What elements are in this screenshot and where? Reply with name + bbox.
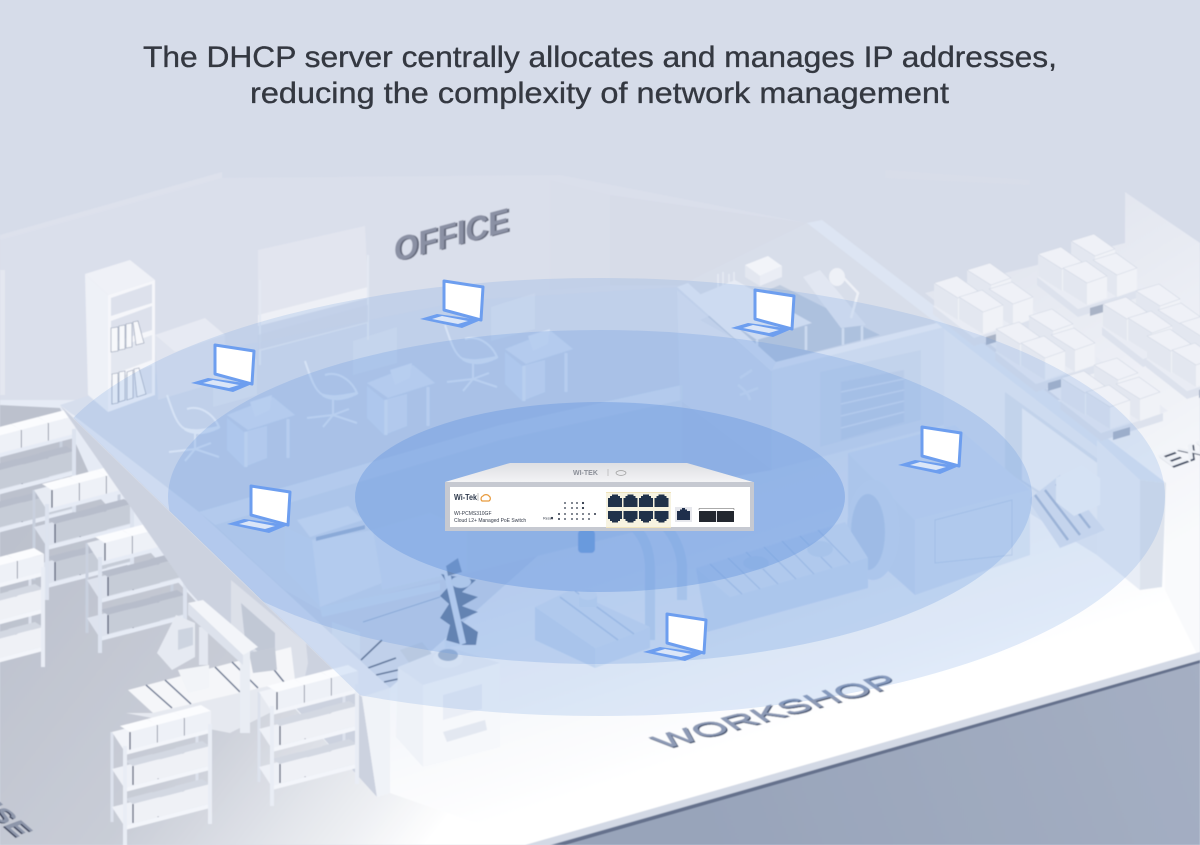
back walls xyxy=(0,170,1030,420)
OFFICE sign: OFFICE xyxy=(396,202,511,270)
bookshelf xyxy=(85,260,155,412)
right warehouse floor xyxy=(925,192,1200,660)
switch logo: Wi-Tek xyxy=(454,492,477,502)
lathe machine xyxy=(285,506,467,622)
warehouse racks back xyxy=(0,410,186,689)
factory scene xyxy=(0,170,1200,845)
laptop 1 xyxy=(191,345,254,392)
laptop 4 xyxy=(898,427,961,474)
roller conveyor right xyxy=(1028,465,1105,548)
laptop 2 xyxy=(420,281,483,328)
status leds xyxy=(551,502,596,520)
small room xyxy=(677,223,944,470)
network switch: WI-TEK xyxy=(573,470,598,477)
workshop floor xyxy=(0,400,1200,845)
title: reducing the complexity of network management xyxy=(250,77,950,110)
desks and chairs xyxy=(167,293,573,467)
title: The DHCP server centrally allocates and manages IP addresses, xyxy=(143,41,1057,74)
bottom dark band xyxy=(525,652,1200,845)
console port xyxy=(675,507,692,522)
cloud icon xyxy=(481,495,490,501)
arch over conveyor xyxy=(625,520,682,640)
WORKSHOP floor label: WORKSHOP xyxy=(644,670,907,753)
robot arm xyxy=(440,558,478,648)
OFFICE sign: OFFICE xyxy=(394,201,509,270)
switch description: Cloud L2+ Managed PoE Switch xyxy=(454,518,526,524)
outer ring xyxy=(35,278,1165,716)
middle ring xyxy=(168,330,1032,664)
warehouse floor left xyxy=(0,405,539,845)
low cabinet xyxy=(155,318,225,400)
laptop 6 xyxy=(643,614,706,661)
dividing wall xyxy=(60,405,390,797)
large machine right xyxy=(847,425,1030,595)
laptop 3 xyxy=(731,290,794,337)
office floor xyxy=(60,287,772,688)
pallets of boxes xyxy=(933,234,1200,441)
WORKSHOP floor label xyxy=(644,670,909,754)
fan stairs xyxy=(332,622,432,682)
model text: WI-PCMS310GF xyxy=(454,511,492,517)
bottle under switch xyxy=(578,530,595,553)
title xyxy=(143,41,1057,110)
inner ring xyxy=(355,402,845,592)
sfp ports xyxy=(699,508,734,522)
gantry conveyor xyxy=(126,600,295,733)
reset label: Reset xyxy=(543,516,554,520)
warehouse racks front xyxy=(112,665,358,845)
wall pillar right xyxy=(1097,440,1166,590)
WORKSHOP floor label: WORKSHOP xyxy=(646,671,909,754)
ethernet ports xyxy=(606,492,671,528)
wifi coverage rings xyxy=(35,278,1165,716)
whiteboard xyxy=(258,226,368,365)
right long wall xyxy=(807,220,1166,590)
front conveyor block xyxy=(535,590,650,668)
control cabinet xyxy=(396,647,500,767)
wall between office and workshop xyxy=(199,385,682,610)
laptop 5 xyxy=(227,486,290,533)
network switch xyxy=(445,463,754,531)
main conveyor xyxy=(696,522,868,632)
